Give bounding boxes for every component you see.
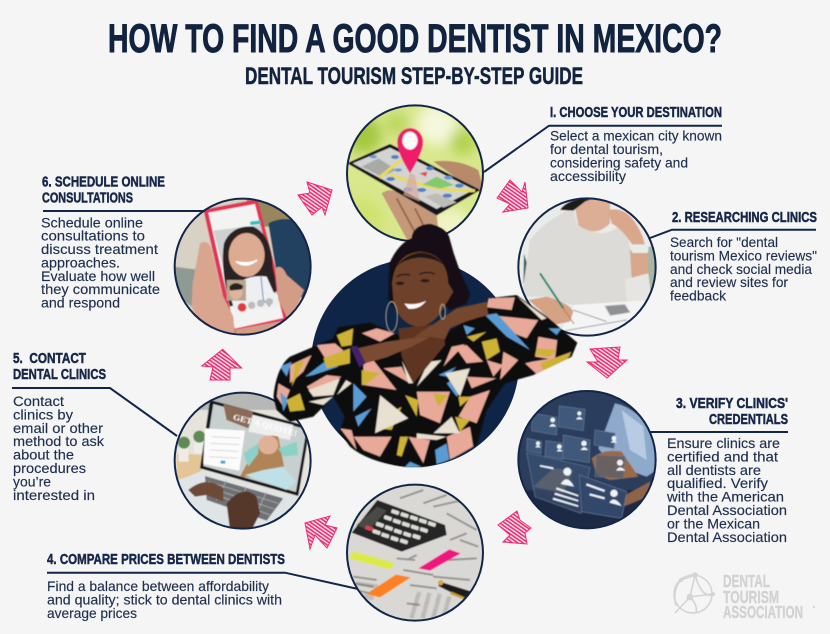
photo: step 5 laptop quote form: GET A QUOTE! bbox=[232, 413, 298, 438]
step 3 text block: CREDENTIALS bbox=[709, 412, 788, 428]
arrow: step 5 to 6 bbox=[202, 349, 242, 380]
step 3 text block: certified and that bbox=[667, 449, 778, 464]
chest and neck bbox=[398, 323, 445, 383]
step 5 text block: 5. CONTACT bbox=[13, 351, 86, 367]
photo: step 6 video call phone bbox=[173, 197, 313, 338]
step 3 text block: all dentists are bbox=[667, 463, 761, 478]
step 4 text block: and quality; stick to dental clinics with bbox=[47, 592, 282, 607]
photo: step 4 calculator and notes bbox=[346, 484, 484, 622]
earrings bbox=[386, 302, 397, 332]
step 1 text block: I. CHOOSE YOUR DESTINATION bbox=[550, 105, 722, 121]
step 6 text block: and respond bbox=[41, 296, 120, 311]
step 3 text block: Dental Association bbox=[667, 503, 787, 518]
smile bbox=[403, 299, 428, 309]
step 6 text block: approaches. bbox=[41, 255, 120, 270]
step 2 text block bbox=[650, 210, 817, 304]
photo: step 3 credentials hologram bbox=[517, 390, 657, 530]
step 6 text block: 6. SCHEDULE ONLINE bbox=[42, 175, 165, 191]
step 6 text block: they communicate bbox=[41, 282, 160, 297]
step 5 text block: interested in bbox=[13, 488, 95, 503]
face bbox=[392, 252, 453, 327]
step 3 text block: 3. VERIFY CLINICS' bbox=[676, 396, 788, 412]
step 6 text block: Evaluate how well bbox=[41, 269, 155, 284]
photo: step 2 person writing bbox=[517, 197, 657, 337]
step 3 text block: with the American bbox=[666, 490, 784, 505]
lower arm and hand bbox=[357, 337, 430, 363]
step 6 text block bbox=[41, 175, 205, 311]
step 2 text block: and review sites for bbox=[670, 275, 788, 290]
step 6 text block: Schedule online bbox=[41, 215, 143, 230]
step 4 text block: 4. COMPARE PRICES BETWEEN DENTISTS bbox=[47, 552, 285, 568]
step 1 text block: accessibility bbox=[550, 169, 626, 184]
step 5 text block: you’re bbox=[13, 474, 51, 489]
step 5 text block bbox=[12, 351, 177, 503]
step 1 text block: for dental tourism, bbox=[550, 142, 663, 157]
step 3 text block: qualified. Verify bbox=[667, 476, 768, 491]
step 5 text block: Contact bbox=[13, 394, 64, 409]
step 5 text block: method to ask bbox=[13, 434, 104, 449]
step 5 text block: clinics by bbox=[13, 407, 73, 422]
step 1 text block: considering safety and bbox=[550, 156, 688, 170]
step 5 text block: email or other bbox=[13, 421, 104, 436]
arrow: step 4 to 5 bbox=[305, 516, 337, 549]
arrow: step 3 to 4 bbox=[498, 511, 531, 544]
step 5 text block: procedures bbox=[13, 461, 86, 476]
step 4 text block: average prices bbox=[47, 606, 137, 621]
step 2 text block: Search for "dental bbox=[670, 235, 778, 250]
photo: step 5 laptop quote form bbox=[173, 390, 313, 533]
arrow: step 2 to 3 bbox=[587, 347, 627, 378]
step 2 text block: and check social media bbox=[670, 262, 812, 277]
step 2 text block: feedback bbox=[670, 289, 726, 304]
step 3 text block: Dental Association bbox=[667, 530, 787, 545]
step 5 text block: DENTAL CLINICS bbox=[13, 367, 106, 383]
dress bbox=[272, 294, 578, 468]
step 3 text block: Ensure clinics are bbox=[667, 436, 780, 451]
step 1 text block: Select a mexican city known bbox=[550, 129, 722, 144]
central woman illustration bbox=[270, 220, 590, 480]
step 1 text block bbox=[484, 105, 722, 184]
logo: Dental Tourism Association: TOURISM bbox=[723, 587, 779, 607]
step 6 text block: discuss treatment bbox=[41, 242, 158, 257]
step 5 text block: about the bbox=[13, 448, 74, 463]
step 4 text block: Find a balance between affordability bbox=[47, 579, 269, 594]
logo: Dental Tourism Association bbox=[674, 571, 815, 622]
step 3 text block bbox=[650, 396, 788, 545]
step 6 text block: CONSULTATIONS bbox=[42, 191, 133, 207]
step 2 text block: tourism Mexico reviews" bbox=[670, 248, 817, 263]
subtitle: DENTAL TOURISM STEP-BY-STEP GUIDE bbox=[245, 63, 583, 90]
central navy circle bbox=[311, 259, 519, 467]
arrow: step 1 to 2 bbox=[497, 180, 528, 212]
photo: step 1 phone map bbox=[346, 104, 484, 242]
hair bbox=[388, 224, 470, 310]
logo: Dental Tourism Association: DENTAL bbox=[723, 571, 770, 591]
arrow: step 6 to 1 bbox=[298, 182, 332, 215]
step 4 text block bbox=[47, 552, 358, 621]
upper arm and hand bbox=[413, 302, 488, 339]
step 6 text block: consultations to bbox=[41, 229, 145, 244]
step 3 text block: or the Mexican bbox=[667, 516, 760, 531]
